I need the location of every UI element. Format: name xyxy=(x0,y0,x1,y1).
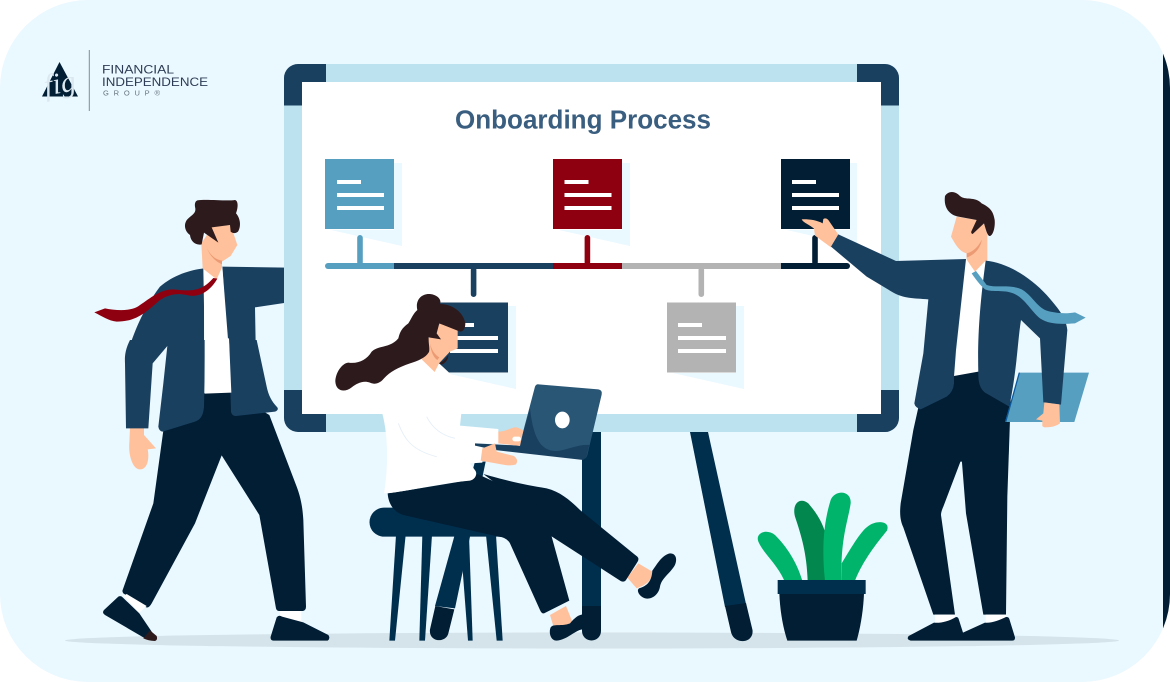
whiteboard xyxy=(284,64,899,432)
logo divider xyxy=(89,50,90,111)
left man front sock xyxy=(280,611,301,623)
woman far foot xyxy=(550,606,572,628)
right man socks xyxy=(935,615,1006,623)
left man lower body xyxy=(103,338,329,641)
dark leaf xyxy=(794,501,827,581)
step 5 card xyxy=(781,159,857,265)
right leaf xyxy=(842,522,888,581)
pot body xyxy=(779,593,864,641)
right man tie xyxy=(972,271,1086,324)
left man back shoe xyxy=(103,596,152,638)
step 4 card xyxy=(667,267,744,389)
plant xyxy=(758,493,888,641)
logo wordmark xyxy=(102,63,208,98)
woman near shoe xyxy=(638,553,676,599)
woman far leg xyxy=(483,474,638,582)
right man trousers xyxy=(900,400,1011,615)
shirt folds xyxy=(398,417,455,457)
right man face xyxy=(951,217,987,273)
man presenting left, jacket arm behind board xyxy=(131,267,287,343)
easel right leg xyxy=(690,432,753,641)
woman lower hand xyxy=(481,443,517,465)
easel left leg xyxy=(430,462,486,640)
seated woman xyxy=(335,294,676,641)
logo wordmark: FINANCIAL xyxy=(102,63,174,77)
right man trousers top xyxy=(910,372,1010,462)
folder xyxy=(1005,373,1089,422)
left man tie xyxy=(94,278,217,322)
left man shirt xyxy=(203,267,228,343)
stool seat xyxy=(369,508,507,537)
woman near foot xyxy=(627,563,652,588)
left man front shoe xyxy=(271,616,329,641)
folder hand xyxy=(1036,402,1060,427)
left man head and shirt xyxy=(94,200,240,343)
left man jacket lower xyxy=(125,340,278,432)
woman shirt xyxy=(382,359,498,493)
right man legs xyxy=(900,400,1015,641)
logo wordmark: INDEPENDENCE xyxy=(102,75,208,89)
board frame xyxy=(284,64,899,432)
left man back shoe toe xyxy=(143,630,157,641)
pot rim xyxy=(778,580,866,594)
woman face xyxy=(422,323,458,372)
laptop logo xyxy=(555,412,570,428)
right man upper body xyxy=(802,192,1089,462)
pointing hand xyxy=(802,218,839,247)
woman hair xyxy=(335,294,465,391)
centre leaf xyxy=(823,493,851,581)
left man trousers xyxy=(122,392,306,611)
left man hand xyxy=(129,427,156,469)
woman neck shade xyxy=(430,343,439,360)
left man neck shade xyxy=(207,247,222,264)
laptop screen xyxy=(519,384,602,459)
left leaf xyxy=(758,532,802,581)
left man back sock xyxy=(123,594,147,613)
woman hair under chin xyxy=(439,355,448,365)
woman upper hand xyxy=(498,427,523,446)
right man shirt xyxy=(954,259,986,376)
frame corners xyxy=(284,64,899,432)
left man shirt lower xyxy=(205,338,231,394)
step 3 card xyxy=(553,159,630,265)
right man neck shade xyxy=(967,239,982,258)
step 1 card xyxy=(325,159,402,265)
board surface xyxy=(302,82,881,414)
floor shadow xyxy=(65,632,1119,648)
woman fingernail xyxy=(512,437,521,441)
right man shoes xyxy=(908,617,1015,641)
logo triangle icon: fig xyxy=(41,65,78,103)
right man hair xyxy=(945,192,995,236)
stool legs xyxy=(389,535,503,641)
timeline bar xyxy=(325,263,850,269)
left man hair xyxy=(185,200,240,245)
logo wordmark: GROUP® xyxy=(103,88,160,98)
easel centre leg xyxy=(582,430,601,640)
right man jacket xyxy=(831,234,1067,409)
logo xyxy=(41,50,208,111)
laptop base xyxy=(475,443,587,460)
right man xyxy=(802,192,1089,641)
title: Onboarding Process xyxy=(455,106,711,134)
woman near leg xyxy=(388,474,569,613)
woman far shoe xyxy=(550,614,583,641)
laptop screen shade xyxy=(519,408,589,459)
step 2 card xyxy=(439,267,516,389)
folder edge xyxy=(1005,373,1020,422)
left man jacket upper xyxy=(131,267,287,343)
left man face xyxy=(201,225,237,279)
